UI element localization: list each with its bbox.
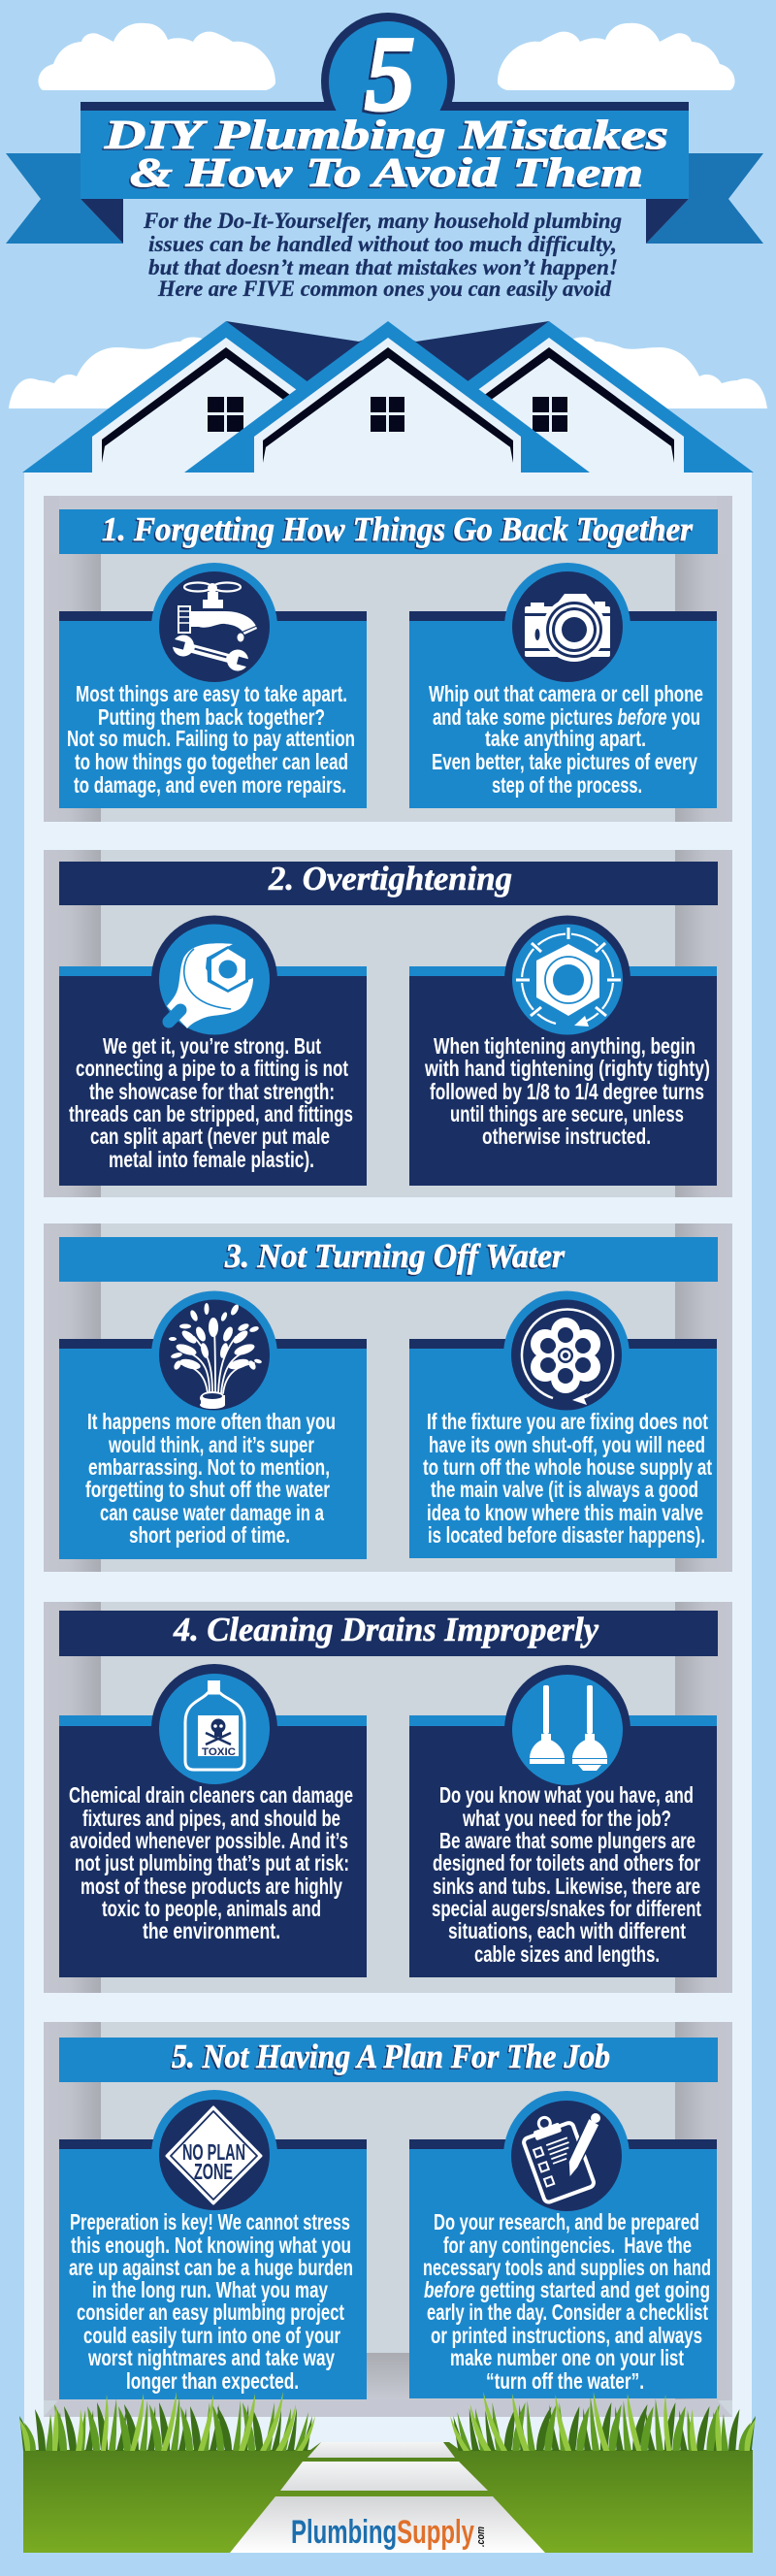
text: Not so much. Failing to pay attention [67, 726, 355, 751]
text: We get it, you’re strong. But [103, 1033, 321, 1059]
icon: nut with tightening arrow [515, 927, 622, 1027]
text: Chemical drain cleaners can damage [69, 1782, 353, 1808]
ribbon fold right [646, 199, 689, 244]
text: forgetting to shut off the water [85, 1477, 330, 1502]
text: step of the process. [492, 772, 642, 798]
ribbon tail left [6, 153, 123, 244]
grass: right tuft [450, 2392, 756, 2451]
intro paragraph: Here are FIVE common ones you can easily avoid [157, 277, 611, 301]
panel: section 3 [44, 1223, 732, 1572]
text: metal into female plastic). [109, 1147, 314, 1172]
card: left [59, 1290, 367, 1559]
card: right [409, 916, 717, 1186]
card: left [59, 2090, 367, 2399]
text: to how things go together can lead [75, 749, 348, 774]
recess [44, 850, 732, 1197]
back roof [226, 321, 549, 398]
icon: no plan zone sign: NO PLAN [182, 2139, 245, 2165]
intro paragraph: but that doesn’t mean that mistakes won’t happen! [148, 255, 618, 279]
text: this enough. Not knowing what you [71, 2233, 351, 2258]
cloud: lower left [9, 338, 233, 408]
banner top band [81, 102, 689, 111]
icon: camera [525, 594, 610, 662]
panel: section 5 [44, 2022, 732, 2417]
text: short period of time. [129, 1522, 290, 1548]
text: threads can be stripped, and fittings [69, 1101, 353, 1126]
text: the environment. [143, 1918, 280, 1943]
panel: section 2 [44, 850, 732, 1197]
ribbon tail right [646, 153, 763, 244]
text: not just plumbing that’s put at risk: [75, 1850, 349, 1875]
text [67, 681, 355, 798]
text: to damage, and even more repairs. [74, 772, 346, 798]
recess [44, 496, 732, 822]
icon: wrench on nut [167, 943, 253, 1028]
icon: no plan zone sign [167, 2107, 261, 2203]
text [69, 1033, 353, 1172]
text [432, 1782, 701, 1967]
card: right [409, 1290, 717, 1558]
recess [44, 1223, 732, 1572]
text [423, 1409, 712, 1548]
number five: 5 [365, 15, 415, 133]
text: could easily turn into one of your [83, 2323, 340, 2348]
card: right [409, 563, 717, 808]
text: can split apart (never put male [90, 1124, 330, 1149]
heading: 3. Not Turning Off Water [224, 1237, 565, 1275]
text: cable sizes and lengths. [474, 1941, 660, 1967]
right gable [344, 321, 754, 473]
heading [59, 1611, 718, 1656]
heading: 4. Cleaning Drains Improperly [173, 1611, 598, 1648]
heading [59, 1237, 718, 1282]
text: otherwise instructed. [482, 1124, 651, 1149]
intro paragraph [143, 209, 622, 301]
window [533, 397, 567, 432]
text [69, 1782, 353, 1943]
center gable [184, 321, 590, 473]
icon: toxic bottle: TOXIC [202, 1746, 236, 1758]
number badge outer [321, 13, 455, 150]
panel: section 1 [44, 496, 732, 822]
card: left [59, 1664, 367, 1977]
icon: toxic bottle [185, 1680, 244, 1770]
icon: shut-off valve wheel [522, 1309, 613, 1405]
cloud: lower right [543, 338, 767, 408]
title text: DIY Plumbing Mistakes [104, 114, 668, 158]
house roof [22, 321, 754, 473]
text [423, 2209, 711, 2394]
text: Most things are easy to take apart. [76, 681, 347, 706]
left gable [22, 321, 430, 473]
intro paragraph: For the Do-It-Yourselfer, many household plumbing [143, 209, 622, 233]
text: until things are secure, unless [450, 1101, 684, 1126]
card: left [59, 563, 367, 808]
grass: left tuft [19, 2392, 315, 2451]
text: can cause water damage in a [100, 1500, 325, 1525]
text: avoided whenever possible. And it’s [70, 1828, 348, 1853]
text [69, 2209, 353, 2394]
text: in the long run. What you may [92, 2277, 328, 2302]
text: most of these products are highly [81, 1874, 342, 1899]
heading: 2. Overtightening [268, 860, 512, 897]
text: It happens more often than you [87, 1409, 336, 1434]
panel: section 4 [44, 1602, 732, 1993]
icon: clipboard and pencil [518, 2109, 600, 2203]
text: Preperation is key! We cannot stress [70, 2209, 350, 2234]
window [208, 397, 243, 432]
text [424, 1033, 710, 1149]
text: the showcase for that strength: [89, 1079, 335, 1104]
house wall [24, 473, 752, 2452]
ribbon fold left [81, 199, 123, 244]
icon: plungers [530, 1685, 607, 1771]
text: would think, and it’s super [108, 1432, 314, 1457]
title text: & How To Avoid Them [130, 151, 643, 196]
text: consider an easy plumbing project [77, 2299, 344, 2325]
text: take anything apart. [485, 726, 646, 751]
text: fixtures and pipes, and should be [82, 1806, 340, 1831]
text: worst nightmares and take way [87, 2345, 335, 2370]
number badge inner [329, 21, 447, 142]
window [371, 397, 404, 432]
intro paragraph: issues can be handled without too much difficulty, [148, 232, 617, 256]
logo: PlumbingSupply [291, 2514, 474, 2551]
logo: .com [475, 2527, 487, 2547]
icon: faucet and wrench [170, 582, 257, 673]
text [429, 681, 703, 798]
text: connecting a pipe to a fitting is not [76, 1056, 348, 1081]
icon: water fountain [169, 1303, 262, 1409]
text: longer than expected. [126, 2368, 299, 2394]
text: what you need for the job? [462, 1806, 671, 1831]
card: right [409, 1665, 717, 1977]
card: left [59, 916, 367, 1186]
text: are up against can be a huge burden [69, 2255, 353, 2280]
text: “turn off the water”. [486, 2368, 644, 2394]
heading: 1. Forgetting How Things Go Back Together [102, 510, 693, 548]
text [85, 1409, 336, 1548]
heading [59, 2038, 718, 2082]
heading: 5. Not Having A Plan For The Job [172, 2038, 610, 2075]
icon: no plan zone sign: ZONE [194, 2159, 233, 2184]
title text [104, 114, 668, 196]
text: Putting them back together? [98, 704, 325, 730]
recess [44, 2022, 732, 2417]
walkway stones [230, 2442, 545, 2553]
card: right [409, 2091, 717, 2398]
lawn [23, 2442, 753, 2553]
text: toxic to people, animals and [102, 1896, 321, 1921]
banner body [81, 111, 689, 199]
heading [59, 860, 718, 905]
cloud: top left [38, 23, 275, 90]
text: embarrassing. Not to mention, [88, 1454, 330, 1480]
recess [44, 1602, 732, 1993]
text: and take some pictures before you [433, 704, 700, 730]
cloud: top right [498, 23, 735, 90]
title banner [6, 13, 763, 244]
text: make number one on your list [450, 2345, 684, 2370]
text: situations, each with different [448, 1918, 686, 1943]
